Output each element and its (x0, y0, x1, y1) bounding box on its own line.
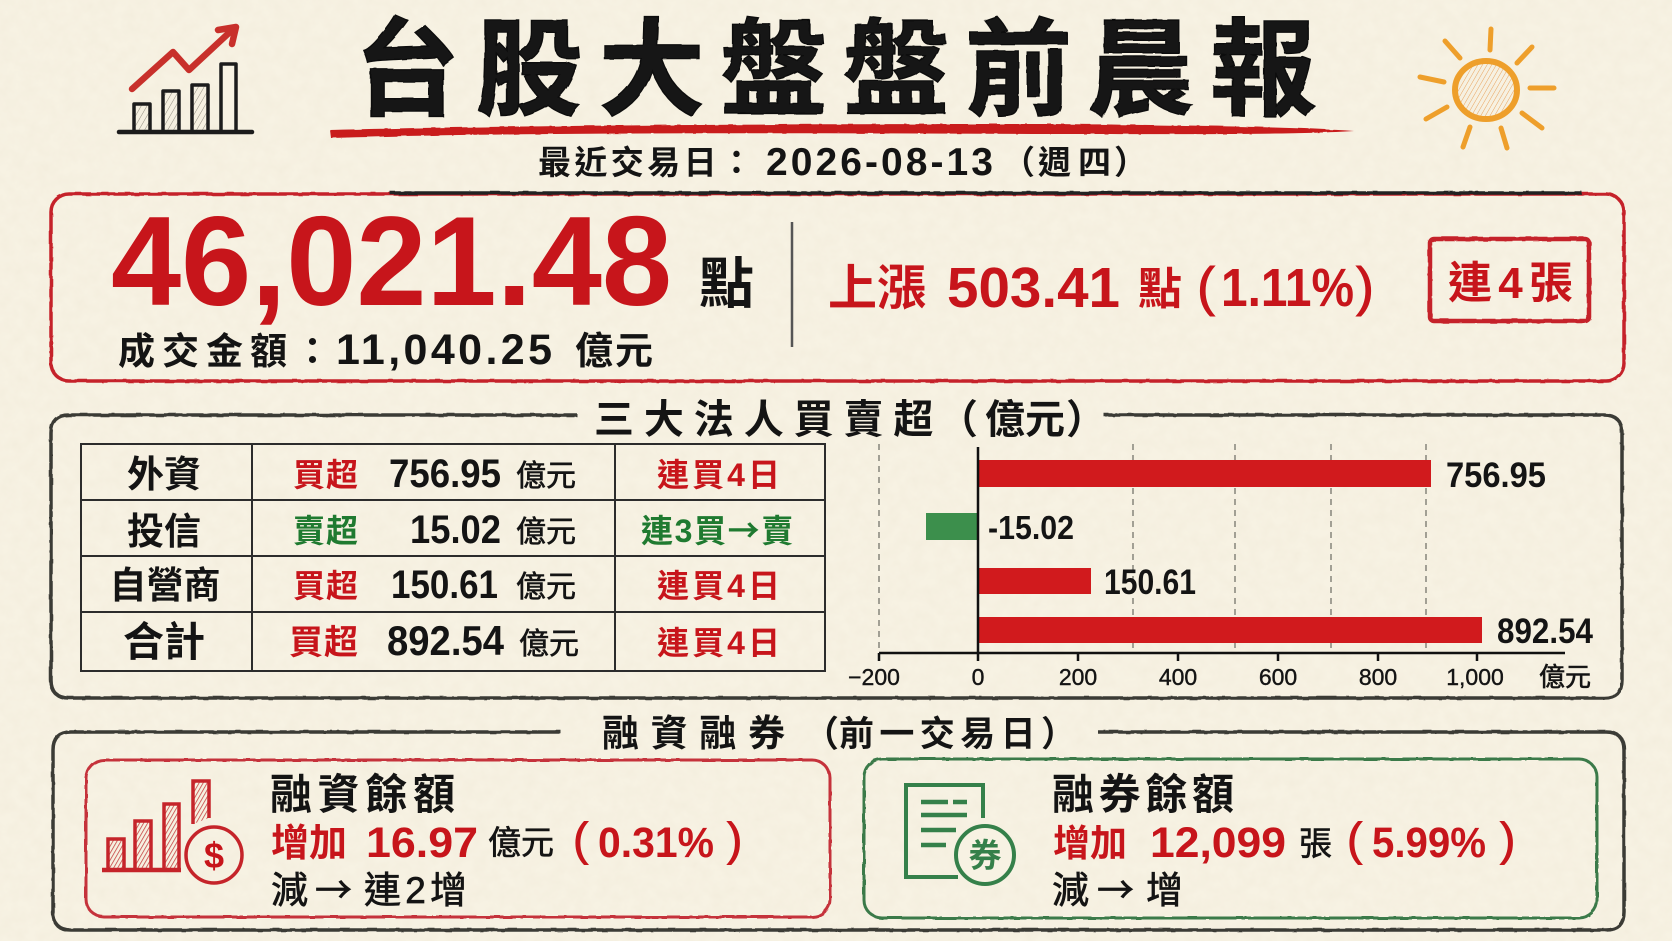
row: investment trust: 投信 (127, 511, 201, 552)
axis labels (848, 662, 1591, 692)
axis labels: 200 (1059, 664, 1097, 690)
bar chart (848, 444, 1593, 692)
short change (1053, 813, 1515, 867)
heading: 融資融券 (602, 713, 797, 754)
short change: 張 (1299, 825, 1332, 862)
index change: ( (1197, 257, 1215, 317)
streak badge (1430, 239, 1589, 321)
title red underline (330, 124, 1354, 138)
row: total: 連買4日 (657, 625, 780, 661)
row: dealers (110, 563, 780, 607)
value labels: -15.02 (988, 509, 1074, 546)
date line (538, 141, 1147, 184)
index change (828, 256, 1374, 320)
index value: 46,021.48 (111, 190, 672, 332)
card: short balance (864, 759, 1597, 918)
margin change: ( (573, 813, 589, 865)
row: dealers: 連買4日 (657, 568, 780, 604)
index change: 上漲 (828, 262, 926, 316)
row: foreign: 外資 (127, 454, 201, 495)
short change: 5.99% (1372, 819, 1486, 867)
card border (86, 760, 830, 917)
panel border (53, 732, 1624, 930)
heading: 前一交易日） (839, 715, 1081, 754)
margin change: 億元 (488, 824, 554, 861)
heading (602, 713, 1081, 754)
row: foreign: 連買4日 (657, 457, 780, 493)
date line: 週四 (1038, 144, 1118, 181)
row: foreign: 756.95 (389, 452, 501, 496)
short trend: 減 (1052, 870, 1089, 911)
icon: document with coupon: 券 (968, 837, 1002, 874)
margin change: 16.97 (366, 819, 478, 867)
title: 台股大盤盤前晨報 (354, 12, 1332, 130)
turnover: 11,040.25 (336, 326, 552, 374)
axis labels: 億元 (1539, 662, 1591, 692)
row: total: 億元 (519, 628, 579, 661)
margin change: 0.31% (598, 819, 714, 867)
row: foreign: 買超 (293, 457, 358, 493)
panel border (51, 193, 1624, 381)
turnover: 億元 (575, 331, 655, 373)
heading: （ (938, 398, 978, 442)
short change: 增加 (1053, 823, 1127, 864)
streak badge: 連4張 (1448, 259, 1573, 308)
card border (864, 759, 1597, 918)
heading: 億元 (985, 398, 1065, 442)
card heading: 融資餘額 (270, 771, 455, 818)
value labels: 150.61 (1104, 563, 1196, 602)
turnover (118, 326, 655, 374)
turnover: 成交金額： (118, 331, 338, 372)
short change: 12,099 (1150, 819, 1286, 867)
axis labels: 400 (1159, 664, 1197, 690)
short change: ( (1347, 813, 1363, 865)
short change: ) (1500, 813, 1515, 865)
axis labels: 800 (1359, 664, 1397, 690)
divider (791, 222, 793, 347)
heading: 三大法人買賣超 (594, 398, 943, 442)
axis labels: 600 (1259, 664, 1297, 690)
value labels (988, 456, 1593, 651)
icon: sun (1420, 29, 1554, 148)
row: investment trust: 15.02 (410, 508, 501, 552)
heading: （ (803, 713, 839, 754)
row: investment trust: 億元 (516, 516, 576, 549)
icon: document with coupon (906, 785, 1014, 884)
row: foreign (127, 452, 780, 496)
margin change (271, 813, 742, 867)
margin change: 增加 (271, 823, 347, 865)
table grid (81, 444, 825, 671)
heading (594, 398, 1106, 442)
heading: ） (1066, 398, 1106, 442)
axis labels: 1,000 (1446, 664, 1504, 690)
row: dealers: 億元 (516, 571, 576, 604)
margin change: ) (727, 813, 742, 865)
row: total: 892.54 (387, 617, 505, 664)
grid lines (879, 444, 1426, 653)
margin trend: 連2增 (364, 870, 467, 911)
row: dealers: 自營商 (110, 565, 220, 606)
card: margin balance (86, 760, 830, 917)
index change: 點 (1138, 265, 1182, 314)
row: dealers: 150.61 (391, 563, 498, 607)
index unit: 點 (699, 253, 754, 315)
row: investment trust: 賣超 (293, 513, 358, 549)
margin trend (271, 860, 467, 914)
margin trend: → (315, 860, 352, 914)
index change: 503.41 (947, 256, 1120, 320)
index change: 1.11% (1221, 258, 1354, 318)
panel: institutional investors (51, 398, 1622, 698)
date line: 2026-08-13 (766, 141, 993, 184)
index change: ) (1356, 257, 1374, 317)
row: investment trust: 連3買→賣 (641, 506, 795, 552)
date line: ） (1114, 144, 1147, 181)
row: dealers: 買超 (293, 568, 358, 604)
axis labels: 0 (972, 664, 984, 690)
icon: rising bar chart with red arrow (119, 27, 252, 132)
axis labels: −200 (848, 664, 900, 690)
table (81, 444, 825, 671)
value labels: 756.95 (1446, 456, 1546, 495)
row: total (123, 617, 780, 665)
axes (879, 447, 1565, 661)
row: total: 買超 (289, 624, 358, 662)
short trend (1052, 860, 1183, 914)
margin trend: 減 (271, 870, 308, 911)
date line: 最近交易日： (538, 144, 756, 181)
row: total: 合計 (123, 619, 205, 665)
short trend: 增 (1146, 870, 1183, 911)
panel border (51, 415, 1622, 698)
row: foreign: 億元 (516, 460, 576, 493)
icon: bars and dollar coin: $ (204, 835, 224, 876)
value labels: 892.54 (1497, 612, 1593, 651)
icon: bars and dollar coin (102, 781, 242, 883)
date line: （ (1002, 144, 1035, 181)
short trend: → (1097, 860, 1134, 914)
panel: margin and short balance (53, 713, 1624, 930)
card heading: 融券餘額 (1052, 771, 1234, 818)
row: investment trust (127, 506, 795, 552)
bars (926, 460, 1482, 643)
panel: index summary (51, 190, 1624, 381)
